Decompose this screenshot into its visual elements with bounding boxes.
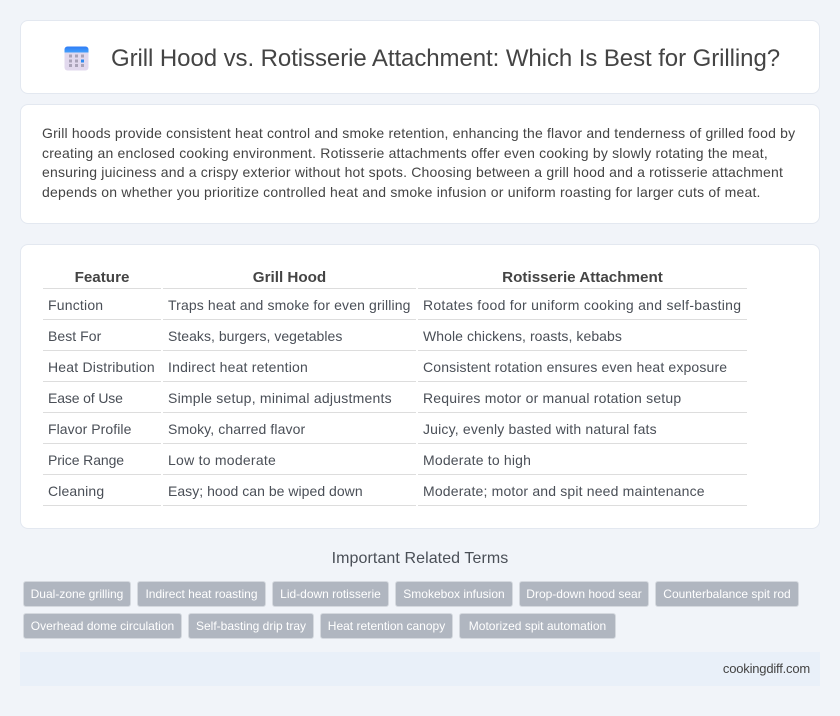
header panel	[20, 20, 820, 94]
row: Flavor Profile: Juicy, evenly basted with natural fats	[423, 421, 657, 437]
heading: Important Related Terms: Important Related Terms	[332, 550, 508, 567]
row: Heat Distribution: Heat Distribution	[48, 359, 155, 375]
row: Ease of Use: Simple setup, minimal adjustments	[168, 390, 392, 406]
tag	[459, 613, 616, 639]
panel: comparison table	[20, 244, 820, 529]
row: Flavor Profile: Flavor Profile	[48, 421, 131, 437]
footer bar	[20, 652, 820, 686]
row: Flavor Profile: Smoky, charred flavor	[168, 421, 305, 437]
related term tags	[23, 581, 799, 639]
tag: Heat retention canopy	[328, 619, 445, 633]
row: Heat Distribution: Consistent rotation ensures even heat exposure	[423, 359, 727, 375]
panel: intro text	[20, 104, 820, 224]
row: Flavor Profile	[43, 421, 747, 444]
intro line 4: depends on whether you prioritize controlled heat and smoke infusion or uniform roasting for larger cuts of meat.	[42, 184, 761, 200]
table header: Feature: Feature	[75, 269, 129, 286]
row: Function: Rotates food for uniform cooking and self-basting	[423, 297, 741, 313]
row: Ease of Use: Ease of Use	[48, 390, 123, 406]
row: Best For	[43, 328, 747, 351]
row: Ease of Use: Requires motor or manual rotation setup	[423, 390, 681, 406]
tag: Smokebox infusion	[403, 587, 505, 601]
table header: Grill Hood: Grill Hood	[253, 269, 326, 286]
row: Cleaning	[43, 483, 747, 506]
row: Price Range: Low to moderate	[168, 452, 276, 468]
tag	[137, 581, 266, 607]
row: Ease of Use	[43, 390, 747, 413]
row: Function	[43, 297, 747, 320]
row: Price Range: Moderate to high	[423, 452, 531, 468]
intro line 2: creating an enclosed cooking environment. Rotisserie attachments offer even cooking by slowly rotating the meat,	[42, 145, 768, 161]
tag: Self-basting drip tray	[196, 619, 306, 633]
row: Best For: Best For	[48, 328, 101, 344]
row: Heat Distribution	[43, 359, 747, 382]
tag: Indirect heat roasting	[145, 587, 258, 601]
footer source: cookingdiff.com	[723, 661, 810, 676]
row: Cleaning: Cleaning	[48, 483, 104, 499]
tag: Overhead dome circulation	[31, 619, 174, 633]
row: Heat Distribution: Indirect heat retention	[168, 359, 308, 375]
intro line 1: Grill hoods provide consistent heat control and smoke retention, enhancing the flavor and tenderness of grilled food by	[42, 125, 795, 141]
tag	[395, 581, 513, 607]
tag: Motorized spit automation	[469, 619, 606, 633]
tag: Drop-down hood sear	[526, 587, 642, 601]
row: Price Range	[43, 452, 747, 475]
tag	[655, 581, 799, 607]
row: Cleaning: Moderate; motor and spit need maintenance	[423, 483, 705, 499]
tag	[23, 581, 131, 607]
row: Function: Function	[48, 297, 103, 313]
table header: Rotisserie Attachment: Rotisserie Attachment	[502, 269, 663, 286]
tag	[188, 613, 314, 639]
row: Function: Traps heat and smoke for even grilling	[168, 297, 411, 313]
row: Cleaning: Easy; hood can be wiped down	[168, 483, 363, 499]
tag	[320, 613, 453, 639]
tag: Counterbalance spit rod	[663, 587, 791, 601]
tag	[519, 581, 649, 607]
tag	[23, 613, 182, 639]
intro line 3: ensuring juiciness and a crispy exterior without hot spots. Choosing between a grill hood and a rotisserie attachment	[42, 164, 783, 180]
icon: calendar	[64, 46, 88, 70]
tag: Dual-zone grilling	[31, 587, 123, 601]
title: Grill Hood vs. Rotisserie Attachment: Which Is Best for Grilling?	[111, 45, 780, 72]
tag	[272, 581, 389, 607]
row: Best For: Whole chickens, roasts, kebabs	[423, 328, 622, 344]
row: Best For: Steaks, burgers, vegetables	[168, 328, 342, 344]
tag: Lid-down rotisserie	[280, 587, 381, 601]
row: Price Range: Price Range	[48, 452, 124, 468]
